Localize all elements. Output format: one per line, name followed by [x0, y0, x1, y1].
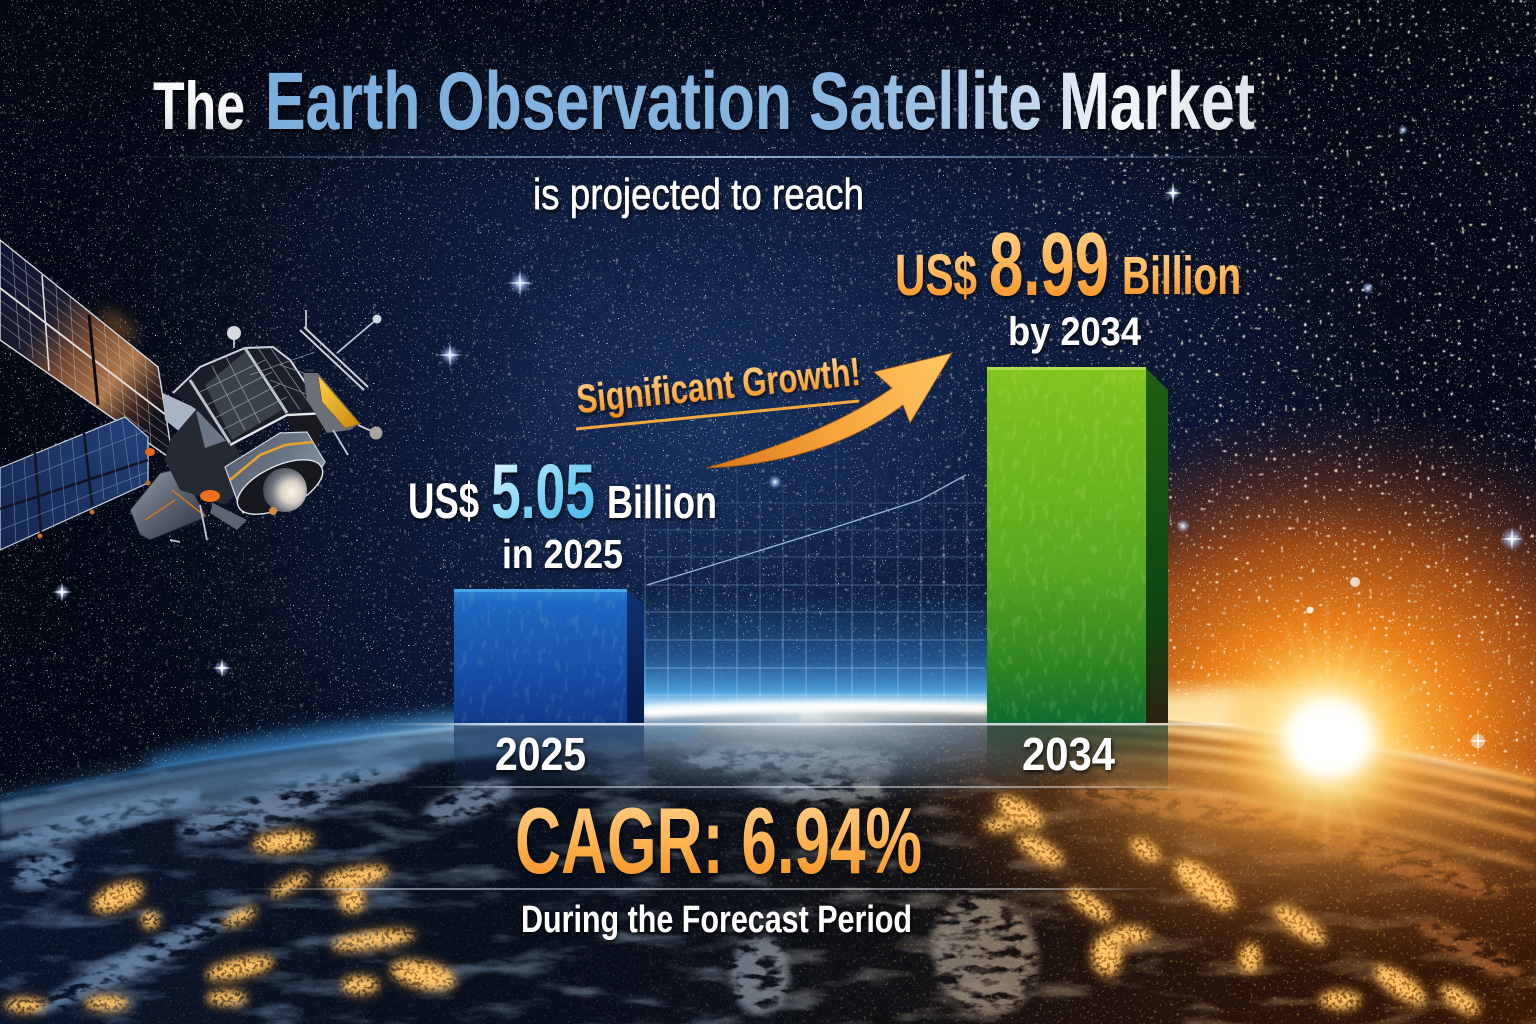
drum rim	[287, 413, 327, 443]
solar panel glow	[96, 307, 140, 345]
lighting tint	[0, 739, 1536, 1024]
green bar 2034	[987, 367, 1168, 723]
value label: 2034: Billion	[1122, 246, 1241, 306]
year axis labels	[495, 728, 1115, 780]
equipment ring	[225, 432, 325, 513]
earth globe	[0, 700, 1536, 1024]
dome sensor	[263, 468, 307, 512]
arrow	[706, 353, 952, 468]
antenna boom	[300, 327, 368, 390]
value label: 2034: by 2034	[1008, 310, 1142, 354]
value label: 2034: US$	[895, 243, 977, 308]
cloud masses	[0, 746, 1530, 1024]
value label: 2034	[895, 215, 1241, 354]
title: The	[153, 68, 245, 144]
value label: 2025: 5.05	[491, 449, 595, 535]
orange fittings	[200, 490, 220, 502]
antenna balls	[227, 326, 241, 340]
drum body	[173, 347, 327, 445]
sun burst	[1217, 600, 1437, 860]
value label: 2034: 8.99	[989, 215, 1109, 315]
year axis labels: 2034	[1022, 728, 1115, 780]
tiny stars over surface	[0, 700, 1536, 1024]
value label: 2025: Billion	[607, 476, 717, 528]
value label: 2025	[408, 449, 717, 577]
subtitle: is projected to reach	[533, 170, 864, 219]
bright stars	[52, 125, 1524, 753]
bar reflections	[454, 725, 1168, 790]
year axis labels: 2025	[495, 728, 586, 780]
strut	[163, 393, 205, 440]
frame under drum	[165, 405, 250, 505]
trend line	[647, 475, 966, 585]
grid chart backdrop	[645, 440, 985, 705]
upper CAGR divider	[400, 786, 1190, 788]
baseline	[380, 723, 1260, 726]
fine surface lights	[0, 700, 1536, 1024]
atmosphere limb	[0, 708, 1536, 797]
forecast caption: During the Forecast Period	[521, 899, 912, 941]
night city clusters	[5, 790, 1483, 1019]
lower equipment box	[130, 468, 207, 540]
growth label: Significant Growth!	[575, 350, 862, 422]
lower CAGR divider	[240, 888, 1170, 890]
label underline	[576, 401, 859, 429]
CAGR figure: CAGR: 6.94%	[515, 788, 922, 893]
atmosphere glow above horizon	[150, 590, 1360, 770]
title divider	[100, 156, 1350, 158]
blue bar 2025	[454, 589, 644, 723]
satellite	[0, 240, 382, 550]
value label: 2025: in 2025	[502, 531, 623, 577]
background: deep space sky	[0, 0, 1536, 796]
lower solar panel	[0, 417, 150, 550]
upper solar panel	[0, 240, 173, 460]
value label: 2025: US$	[408, 473, 479, 529]
gold dish	[303, 373, 360, 433]
atmosphere bands	[0, 716, 1536, 868]
growth arrow with label	[575, 350, 952, 468]
